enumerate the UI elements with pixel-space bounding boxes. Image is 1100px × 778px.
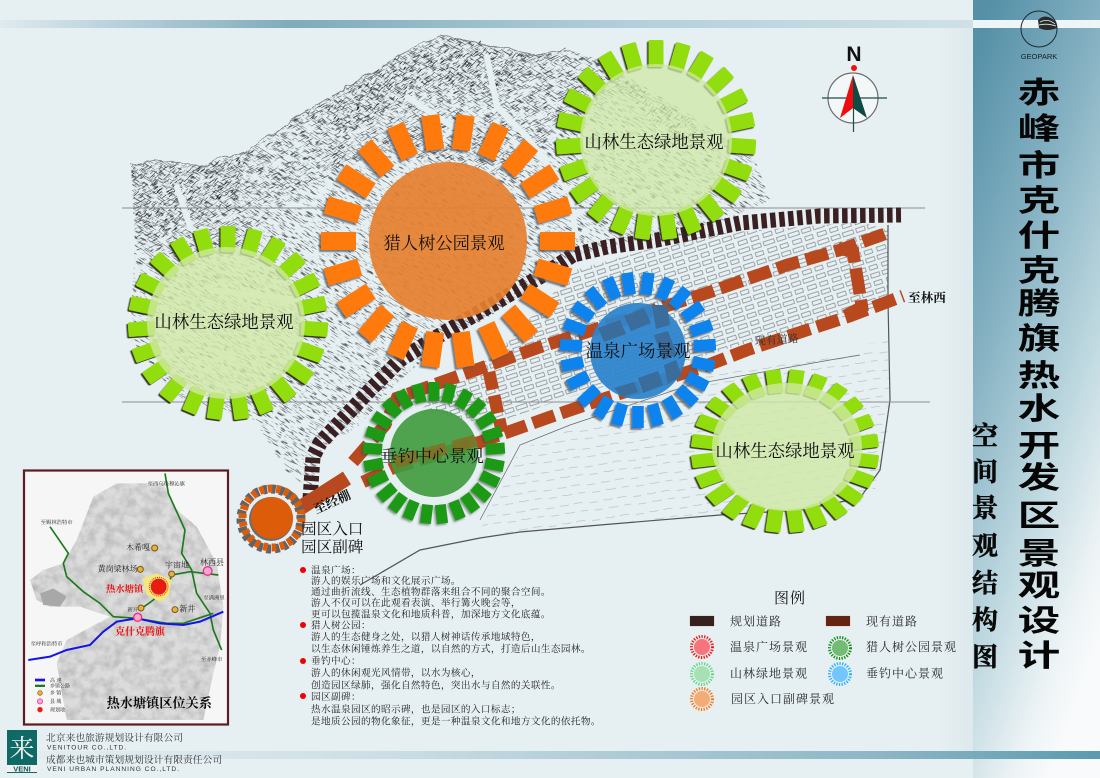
title: vertical main heading: 克 [1018, 184, 1060, 218]
icon: geopark logo [1021, 11, 1057, 61]
description: hunter tree park: 以生态休闲锤炼养生之道，以自然的方式，打造后山生态园林。 [311, 643, 591, 655]
description: sub monument [311, 691, 601, 728]
label: hunter tree park: 猎人树公园景观 [384, 234, 504, 253]
description: fishing centre [311, 655, 561, 692]
title: vertical main heading: 赤 [1018, 76, 1060, 110]
subtitle: vertical heading: 观 [972, 532, 998, 561]
subtitle: vertical heading: 结 [972, 569, 998, 598]
inset map title: 热水塘镇区位关系 [107, 694, 213, 710]
road: cross connector [489, 372, 502, 432]
town blocks [420, 222, 888, 425]
subtitle: vertical heading: 图 [972, 643, 998, 672]
title: vertical main heading: 市 [1018, 149, 1060, 183]
subtitle: vertical heading: 景 [972, 494, 999, 523]
planned road [310, 215, 901, 499]
bottom band [0, 751, 1100, 759]
inset legend: 高 速 [50, 677, 61, 684]
inset labels: 新开 [127, 606, 139, 614]
inset labels: 至西乌珠穆沁旗 [148, 479, 186, 487]
label: park entrance: 园区入口 [301, 520, 363, 538]
legend text: plaza: 温泉广场景观 [730, 639, 808, 654]
inner boundary line [480, 355, 860, 520]
legend text: entrance: 园区入口副碑景观 [731, 692, 835, 706]
company english: Veni Urban: VENI URBAN PLANNING CO.,LTD. [47, 766, 180, 773]
inset legend: 乡镇公路 [50, 683, 70, 690]
legend icon: fishing [830, 664, 850, 684]
legend text: hunter park: 猎人树公园景观 [866, 639, 957, 654]
subtitle: vertical heading: 空 [972, 422, 998, 451]
inset labels: 至呼和浩特市 [31, 640, 63, 648]
icon: north arrow [822, 43, 887, 132]
subtitle: vertical heading [972, 422, 999, 672]
road overlay on fishing disc [395, 440, 478, 462]
title: vertical main heading: 发 [1018, 461, 1060, 495]
valley streams [177, 57, 575, 300]
icon: north arrow: N [846, 43, 862, 66]
description: fishing centre: 游人的休闲观光风情带，以水为核心， [311, 667, 481, 679]
legend text: existing road: 现有道路 [866, 614, 918, 628]
legend text: planned road: 规划道路 [730, 614, 782, 628]
description: sub monument: 是地质公园的物化象征，更是一种温泉文化和地方文化的依托物。 [311, 716, 601, 728]
inset planning area [143, 573, 172, 602]
legend icon: entrance [692, 688, 712, 710]
inset location map [24, 470, 228, 724]
description: hot spring plaza: 更可以包揽温泉文化和地质科普，加深地方文化底蕴。 [311, 608, 551, 620]
description: sub monument: 园区副碑： [311, 691, 361, 703]
south-east contours [480, 340, 890, 535]
inset labels: 至满洲里 [203, 593, 225, 601]
label: to Jingpeng: 至经棚 [311, 487, 353, 517]
grid lines [122, 208, 930, 402]
company logo: VENI [13, 764, 31, 774]
inset labels: 黄岗梁林场 [98, 564, 138, 574]
road: lower branch [363, 296, 903, 482]
legend icon: green land [692, 664, 712, 684]
inset terrain [30, 483, 223, 720]
inset roads [50, 473, 222, 650]
company name: Beijing: 北京来也旅游规划设计有限公司 [46, 731, 183, 744]
description: hot spring plaza: 通过曲折流线、生态植物群落来组合不同的聚合空间。 [311, 586, 551, 598]
icon: geopark logo: GEOPARK [1021, 52, 1057, 61]
landscape node: fishing centre [363, 382, 505, 524]
legend [690, 590, 957, 710]
inset labels: 至赐林浩特市 [41, 518, 73, 526]
title: vertical main heading: 克 [1018, 254, 1060, 288]
label: park sub monument: 园区副碑 [301, 538, 364, 556]
description: sub monument: 热水温泉园区的昭示碑，也是园区的入口标志； [311, 704, 521, 716]
hill outline [131, 35, 568, 166]
legend title: 图例 [774, 590, 806, 607]
landscape node: hot spring plaza [560, 272, 716, 428]
legend swatch: existing road [826, 616, 850, 626]
title: vertical main heading: 热 [1018, 359, 1060, 393]
inset red labels: 热水塘镇 [106, 583, 145, 595]
south-east boundary line [360, 225, 890, 585]
inset labels [31, 479, 225, 663]
inset labels: 新井 [179, 604, 195, 614]
inset legend: 县 城 [50, 698, 61, 705]
inset red labels [106, 583, 166, 638]
description: hot spring plaza [311, 564, 551, 620]
description: hunter tree park: 猎人树公园： [311, 620, 371, 632]
description: fishing centre: 垂钓中心： [311, 655, 361, 667]
company logo [7, 730, 37, 774]
title: vertical main heading: 区 [1018, 499, 1060, 533]
title: vertical main heading: 水 [1018, 392, 1061, 426]
inset legend: 规划地 [50, 706, 65, 713]
road: east connector [838, 248, 862, 316]
label: west mountain green: 山林生态绿地景观 [154, 312, 294, 332]
bullet markers [300, 567, 306, 699]
inset legend [35, 677, 70, 713]
landscape node: hunter tree park [321, 114, 575, 368]
dark ridge strokes [31, 0, 800, 524]
label: fishing centre: 垂钓中心景观 [380, 447, 484, 466]
legend icon: hunter park [830, 638, 850, 658]
legend text: green land: 山林绿地景观 [730, 666, 808, 680]
title: vertical main heading: 什 [1018, 219, 1060, 253]
inset labels: 宇宙地 [165, 559, 189, 569]
dense hatching [38, 0, 733, 471]
title: vertical main heading: 设 [1018, 604, 1060, 638]
company english: Venitour: VENITOUR CO.,LTD. [47, 744, 127, 752]
title: vertical main heading: 景 [1018, 537, 1060, 571]
description: hot spring plaza: 游人不仅可以在此观看表演、举行篝火晚会等， [311, 597, 521, 609]
legend text: fishing: 垂钓中心景观 [866, 666, 944, 680]
inset labels: 木希嘎 [126, 542, 150, 552]
inset red labels: 克什克腾旗 [115, 625, 166, 638]
description: hunter tree park: 游人的生态健身之处，以猎人树神话传承地域特色， [311, 631, 541, 643]
existing roads [300, 232, 903, 508]
subtitle: vertical heading: 间 [972, 458, 998, 487]
road: entrance section [300, 478, 347, 508]
title: vertical main heading: 腾 [1018, 287, 1061, 321]
title: vertical main heading: 观 [1018, 569, 1060, 603]
title: vertical main heading [1018, 76, 1061, 673]
inset labels: 林西县 [200, 557, 224, 567]
inset legend: 乡 镇 [50, 690, 62, 697]
description: hot spring plaza: 游人的娱乐广场和文化展示广场。 [311, 575, 461, 587]
title: vertical main heading: 峰 [1018, 112, 1061, 146]
inset towns [137, 545, 178, 613]
legend swatch: planned road [690, 616, 714, 626]
landscape node: south-east mountain green [691, 369, 879, 533]
inset counties [134, 567, 212, 621]
description text block [300, 564, 601, 728]
subtitle: vertical heading: 构 [972, 605, 998, 635]
description: hunter tree park [311, 620, 591, 655]
top band [0, 20, 973, 28]
label: hot spring plaza: 温泉广场景观 [586, 341, 690, 361]
title: vertical main heading: 计 [1018, 639, 1060, 673]
label: south-east mountain green: 山林生态绿地景观 [715, 441, 855, 461]
description: hot spring plaza: 温泉广场： [311, 564, 361, 576]
description: fishing centre: 创造园区绿肺，强化自然特色，突出水与自然的关联性。 [311, 680, 561, 692]
inset highway [28, 612, 223, 660]
title: vertical main heading: 开 [1018, 429, 1060, 463]
landscape node: north mountain green [556, 40, 756, 240]
label: to Linxi: 至林西 [908, 290, 946, 305]
title: vertical main heading: 旗 [1018, 322, 1060, 356]
label: north mountain green: 山林生态绿地景观 [584, 132, 724, 152]
right title panel [940, 0, 1100, 778]
label: existing road: 现有道路 [754, 332, 799, 348]
company logo: 来 [9, 735, 35, 763]
company name: Chengdu: 成都来也城市策划规划设计有限责任公司 [46, 753, 222, 766]
landscape node: west mountain green [128, 226, 328, 420]
legend icon: plaza [692, 636, 712, 658]
landscape node: park entrance [241, 488, 302, 549]
road: upper branch [353, 232, 890, 462]
inset labels: 至赤峰市 [201, 655, 223, 663]
